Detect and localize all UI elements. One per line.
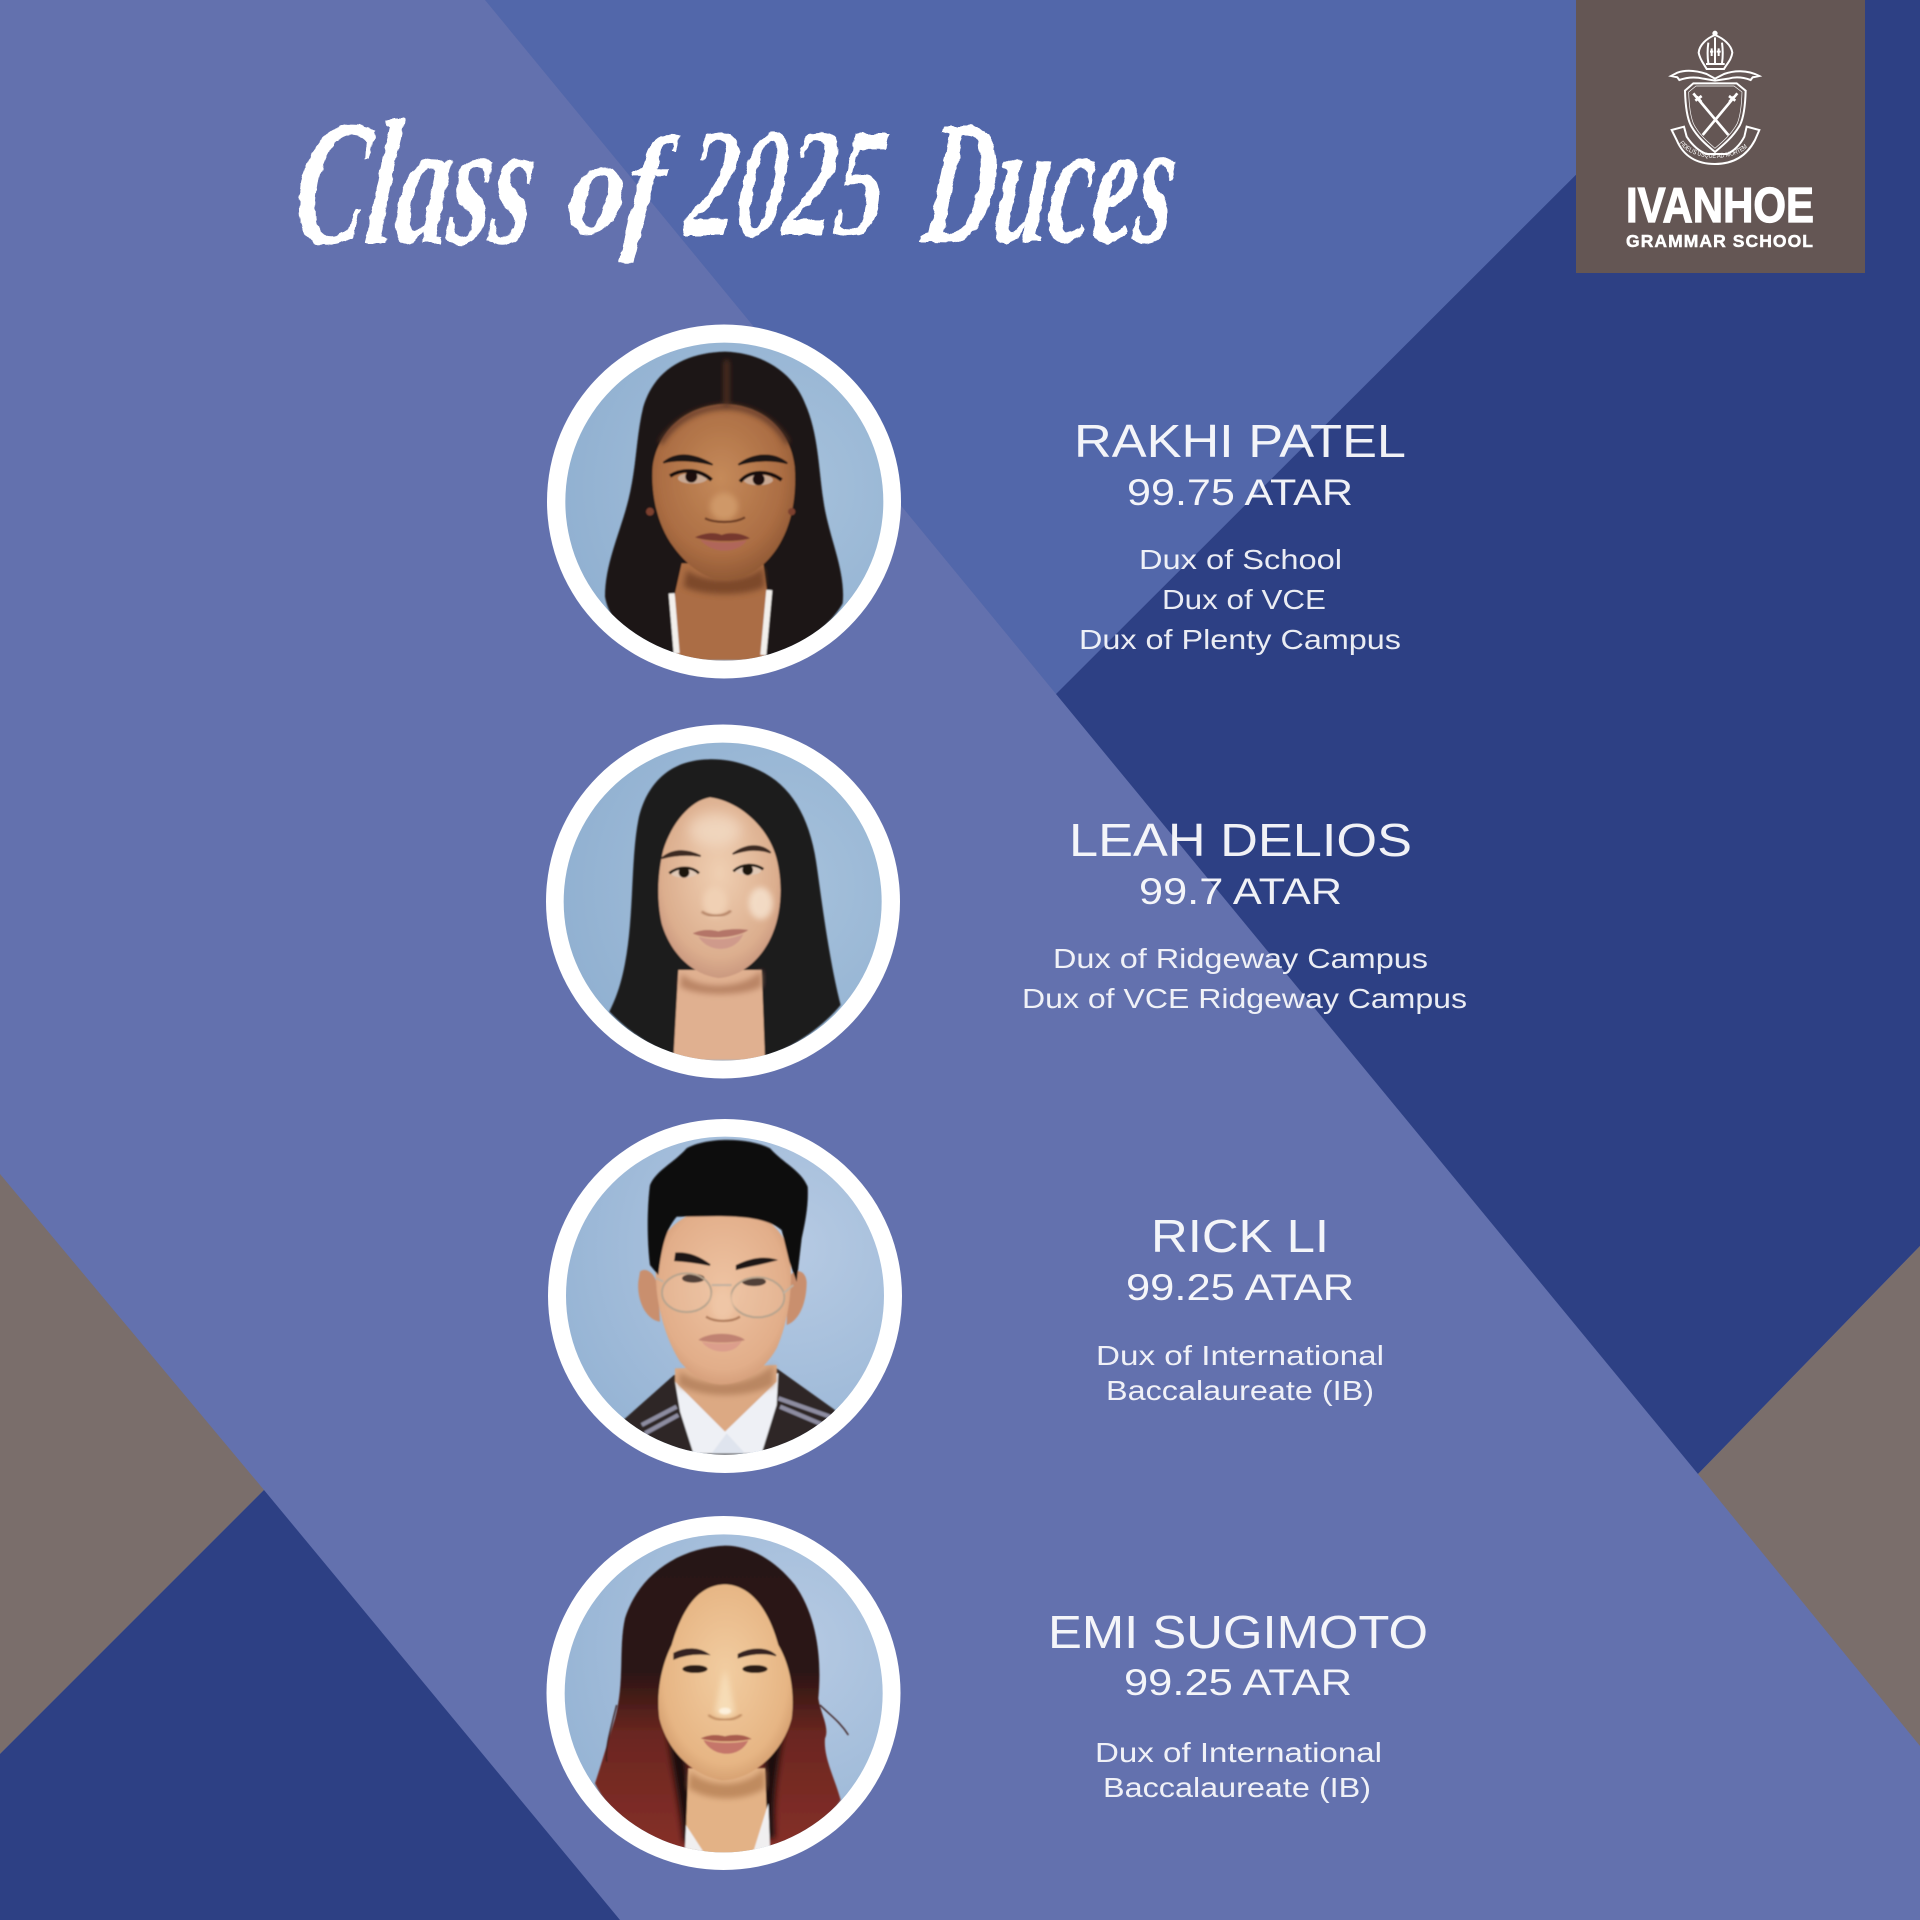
name: LEAH DELIOS [1069, 814, 1412, 866]
titles: Dux of Plenty Campus [1079, 624, 1401, 655]
logo sub-wordmark: GRAMMAR SCHOOL [1626, 231, 1813, 251]
titles: Dux of School [1139, 544, 1342, 575]
icon: school crest [1668, 30, 1762, 165]
score: 99.25 ATAR [1124, 1662, 1352, 1703]
title: Duces [915, 83, 1187, 281]
background: medium blue triangle [485, 0, 1751, 694]
portrait: Rakhi Patel [547, 324, 901, 678]
titles: Dux of International [1095, 1737, 1382, 1768]
portrait: Leah Delios [546, 724, 900, 1078]
title [287, 83, 1187, 282]
text: Rakhi Patel [1074, 415, 1406, 655]
title: Class [287, 84, 546, 282]
background: dark navy bottom-left shape [0, 1490, 620, 1920]
titles [1079, 544, 1401, 655]
titles: Baccalaureate (IB) [1103, 1772, 1371, 1803]
titles [1022, 943, 1467, 1014]
name: EMI SUGIMOTO [1048, 1606, 1428, 1658]
titles: Dux of International [1096, 1340, 1384, 1371]
titles: Baccalaureate (IB) [1106, 1375, 1374, 1406]
titles: Dux of Ridgeway Campus [1053, 943, 1428, 974]
name: RICK LI [1151, 1210, 1329, 1262]
score: 99.25 ATAR [1126, 1267, 1354, 1308]
title: of [562, 109, 683, 264]
titles [1096, 1340, 1384, 1406]
text: Rick Li [1096, 1210, 1384, 1406]
background: dark navy right panel [1056, 0, 1920, 1474]
motto text: FIDELIS USQUE AD MORTEM [1680, 140, 1748, 159]
titles: Dux of VCE [1162, 584, 1326, 615]
background: taupe left triangle [0, 1174, 264, 1754]
logo wordmark: IVANHOE [1626, 179, 1814, 233]
logo block: Ivanhoe Grammar School [1576, 0, 1865, 273]
score: 99.75 ATAR [1127, 472, 1353, 513]
background: taupe right triangle [1698, 1246, 1920, 1746]
titles [1095, 1737, 1382, 1803]
text: Leah Delios [1022, 814, 1467, 1014]
score: 99.7 ATAR [1139, 871, 1342, 912]
titles: Dux of VCE Ridgeway Campus [1022, 983, 1467, 1014]
text: Emi Sugimoto [1048, 1606, 1428, 1803]
portrait: Emi Sugimoto [546, 1516, 900, 1870]
name: RAKHI PATEL [1074, 415, 1406, 467]
title: 2025 [678, 97, 895, 269]
portrait: Rick Li [548, 1119, 902, 1473]
